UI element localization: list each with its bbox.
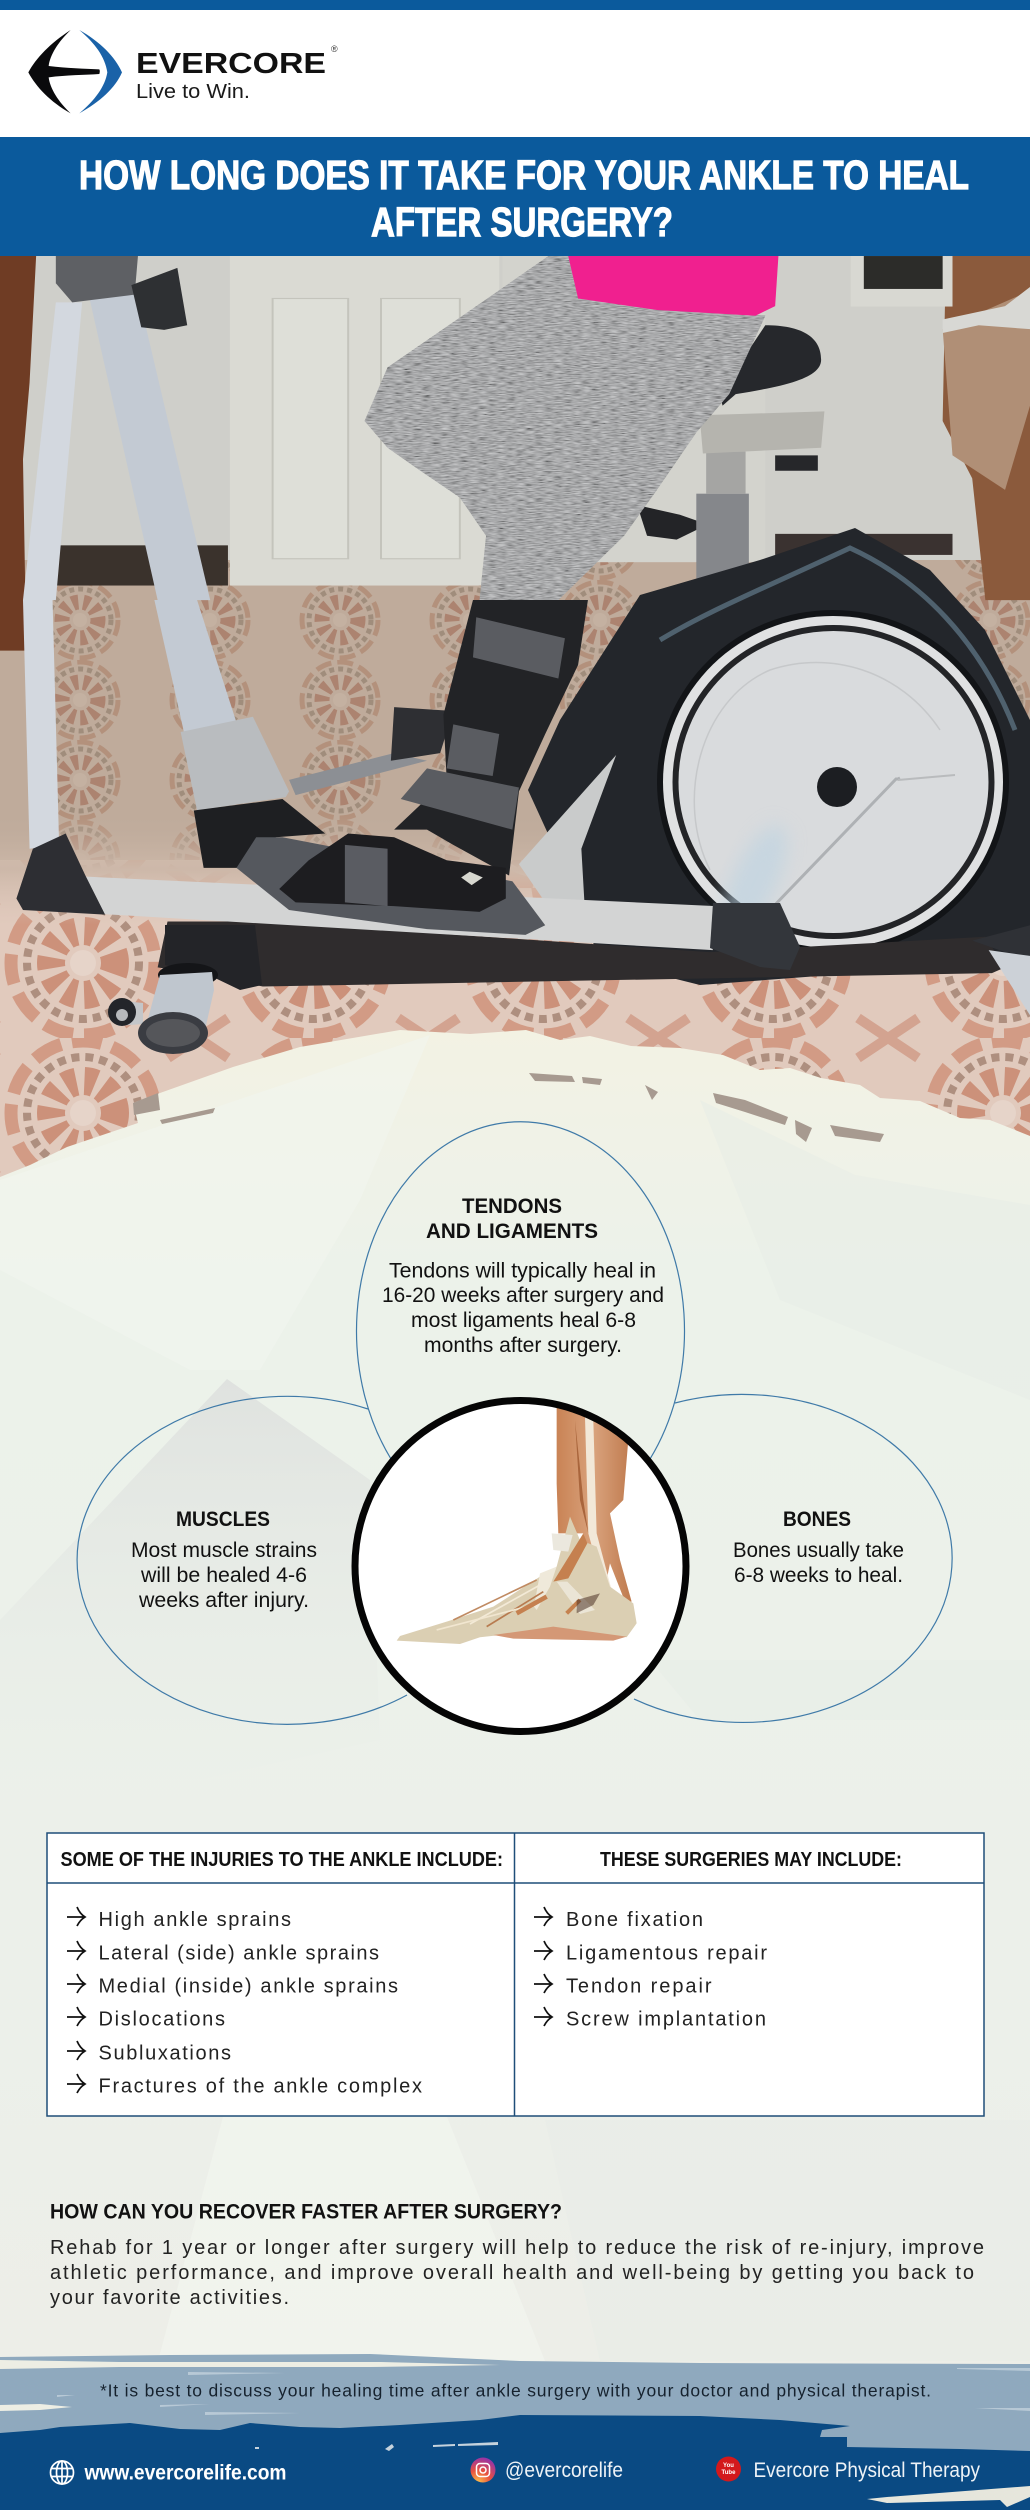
icon: youtube: You [723,2463,734,2469]
silver housing lower [23,600,325,868]
text: muscles: weeks after injury. [138,1589,309,1612]
text: bones: BONES [783,1508,851,1531]
boot foot strap [345,845,388,906]
center circle with foot anatomy [355,1400,686,1732]
logo [28,30,338,113]
text: tendons and ligaments: AND LIGAMENTS [426,1220,598,1243]
title: AFTER SURGERY? [371,199,673,245]
seat [719,325,821,406]
brand name: EVERCORE [136,48,326,80]
footer light wave [0,2354,1030,2510]
top bar [0,0,1030,10]
window [851,256,953,307]
floor blend [0,828,542,916]
list: surgeries: Tendon repair [566,1976,712,1998]
door left [230,256,499,586]
list: injuries: Dislocations [98,2008,225,2030]
text: tendons and ligaments: Tendons will typically heal in [389,1260,656,1282]
list: injuries: Medial (inside) ankle sprains [98,1976,398,1998]
footer streaks [57,2368,1030,2415]
text: bones: 6-8 weeks to heal. [734,1564,903,1587]
text: recovery paragraph: Rehab for 1 year or longer after surgery will help to reduce the risk of re-injury, improve [50,2237,984,2259]
list: injuries: Subluxations [98,2042,231,2064]
footer [0,2354,1030,2510]
body sheen [660,548,1015,730]
list: injuries [67,1907,422,2098]
footer cream streak [867,2486,1030,2507]
frame bracket [56,256,138,302]
footer specks [255,2442,498,2451]
registered mark: ® [331,44,338,54]
text: recovery paragraph [50,2237,984,2309]
boot foot [279,833,506,912]
icon: youtube [716,2456,741,2482]
foot pedal [236,837,545,935]
text: muscles [131,1508,317,1612]
website: www.evercorelife.com [84,2462,286,2484]
base housing [158,921,1005,987]
footer dark band [0,2415,1030,2510]
text: tendons and ligaments [382,1195,664,1357]
baseboard left [56,545,228,586]
icon: globe [50,2461,74,2484]
text: muscles: Most muscle strains [131,1539,317,1562]
title band [0,137,1030,256]
tagline: Live to Win. [136,81,250,103]
bar end cap [16,833,105,915]
heading: recover faster: HOW CAN YOU RECOVER FASTER AFTER SURGERY? [50,2200,562,2224]
list: injuries: Fractures of the ankle complex [98,2076,422,2098]
frame pole outer [23,302,82,600]
list: surgeries: Screw implantation [566,2008,766,2030]
wall [23,256,981,560]
background upper scene [0,256,1030,651]
pedal bar [79,876,716,950]
footer torn highlights [0,2360,500,2411]
leggings [365,256,765,600]
text: muscles: MUSCLES [176,1508,270,1531]
text: bones: Bones usually take [733,1539,904,1562]
text: muscles: will be healed 4-6 [140,1564,307,1587]
circle outline: tendons [356,1122,685,1459]
list: injuries: Lateral (side) ankle sprains [98,1942,379,1964]
icon: ankle anatomy [397,1407,637,1644]
text: tendons and ligaments: most ligaments heal 6-8 [411,1309,636,1332]
heading: injuries: SOME OF THE INJURIES TO THE ANKLE INCLUDE: [60,1849,503,1871]
note: *It is best to discuss your healing time after ankle surgery with your doctor and physical therapist. [100,2380,931,2400]
heading: surgeries: THESE SURGERIES MAY INCLUDE: [600,1849,902,1871]
rear pedal arm [289,707,453,795]
boot leg [394,600,588,876]
seat post [640,412,824,578]
door right [597,560,760,562]
machine body [528,528,1030,985]
list: surgeries: Bone fixation [566,1909,703,1931]
wood furniture left [0,256,36,651]
text: tendons and ligaments: months after surgery. [424,1334,622,1357]
pink shirt [568,256,778,316]
lower paper background [0,1030,1030,2380]
text: tendons and ligaments: 16-20 weeks after surgery and [382,1284,664,1307]
list: surgeries [534,1907,767,2030]
icon: evercore mark [28,30,122,113]
icon: youtube: Tube [722,2470,736,2476]
list: injuries: High ankle sprains [98,1909,291,1931]
circle outline: muscles [77,1396,407,1724]
youtube channel: Evercore Physical Therapy [754,2459,980,2482]
front foot support [108,925,262,1054]
silver wedge [519,755,616,906]
flywheel [657,610,1009,954]
text: recovery paragraph: athletic performance, and improve overall health and well-being by getting you back to [50,2262,974,2284]
panel: injuries and surgeries table [47,1833,984,2116]
background facets [0,1035,1030,2361]
knob [131,268,187,330]
list: surgeries: Ligamentous repair [566,1942,767,1964]
baseboard right [775,534,953,555]
floor tiles near [0,860,1030,1190]
torn paper specks [133,1073,884,1142]
panel: venn circles [77,1122,952,1732]
boot tag [461,872,483,885]
circle outline: bones [634,1394,952,1722]
title [79,152,969,245]
icon: instagram [470,2458,496,2482]
boot straps [401,617,565,830]
text: bones [733,1508,904,1587]
right support tube [972,925,1030,1015]
text: recovery paragraph: your favorite activities. [50,2287,289,2309]
crank hub [710,903,800,970]
photo: person with booted foot on elliptical machine [0,256,1030,1190]
wood furniture right [943,256,1030,600]
floor tiles far [0,560,1030,890]
frame pole inner [89,279,210,600]
text: tendons and ligaments: TENDONS [462,1195,562,1218]
instagram handle: @evercorelife [505,2459,623,2482]
